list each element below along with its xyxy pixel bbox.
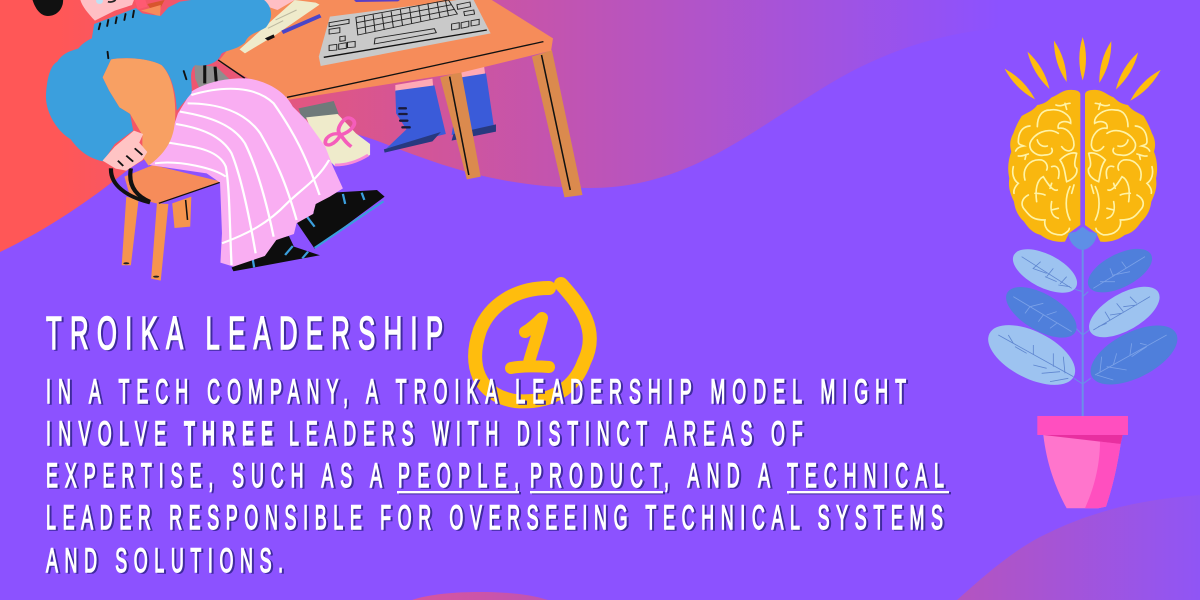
desk [218, 0, 582, 197]
keyboard [319, 0, 491, 66]
paragraph: PEOPLE, [398, 456, 519, 495]
boots under desk [384, 67, 496, 153]
paragraph: INVOLVE [46, 414, 166, 453]
number 1 in circle [475, 284, 590, 401]
paragraph [46, 372, 949, 580]
pot [1037, 416, 1128, 508]
hemispheres [1008, 90, 1157, 242]
paragraph: LEADER RESPONSIBLE FOR OVERSEEING TECHNICAL SYSTEMS [46, 498, 943, 537]
hand-drawn circle [475, 284, 590, 401]
paragraph: THREE [184, 414, 273, 453]
icon: plant with brain [979, 37, 1186, 508]
paragraph: AND SOLUTIONS. [46, 541, 283, 580]
rays [1002, 37, 1163, 103]
pink striped skirt [149, 78, 343, 267]
bottom center blob [412, 592, 548, 600]
illustration: person at desk [33, 0, 582, 281]
paragraph: EXPERTISE, SUCH AS A [46, 456, 382, 495]
stem [1082, 245, 1084, 417]
tulip base [1068, 227, 1097, 250]
leaves [979, 240, 1186, 397]
grey stripes behind sweater [194, 65, 230, 87]
bottom right blob [957, 495, 1200, 600]
cream shoe with bow [299, 101, 370, 166]
hand [103, 131, 147, 171]
pink paper corner [264, 0, 295, 10]
paragraph: LEADERS WITH DISTINCT AREAS OF [289, 414, 803, 453]
brain [1002, 37, 1163, 250]
head and hair [33, 0, 165, 21]
paragraph: IN A TECH COMPANY, A TROIKA LEADERSHIP MODEL MIGHT [46, 372, 906, 411]
black shoes [232, 190, 385, 271]
chair [111, 165, 221, 281]
paragraph: , AND A [664, 456, 771, 495]
heading: TROIKA LEADERSHIP [46, 307, 443, 359]
numeral one [511, 318, 549, 368]
orange torso [103, 58, 175, 166]
paragraph: PRODUCT [530, 456, 661, 495]
paragraph: TECHNICAL [787, 456, 944, 495]
text block [46, 307, 949, 580]
paper and pencil [240, 0, 321, 53]
brain folds [1013, 103, 1153, 235]
blue sweater [46, 0, 271, 161]
dark purple item on desk [354, 0, 400, 2]
